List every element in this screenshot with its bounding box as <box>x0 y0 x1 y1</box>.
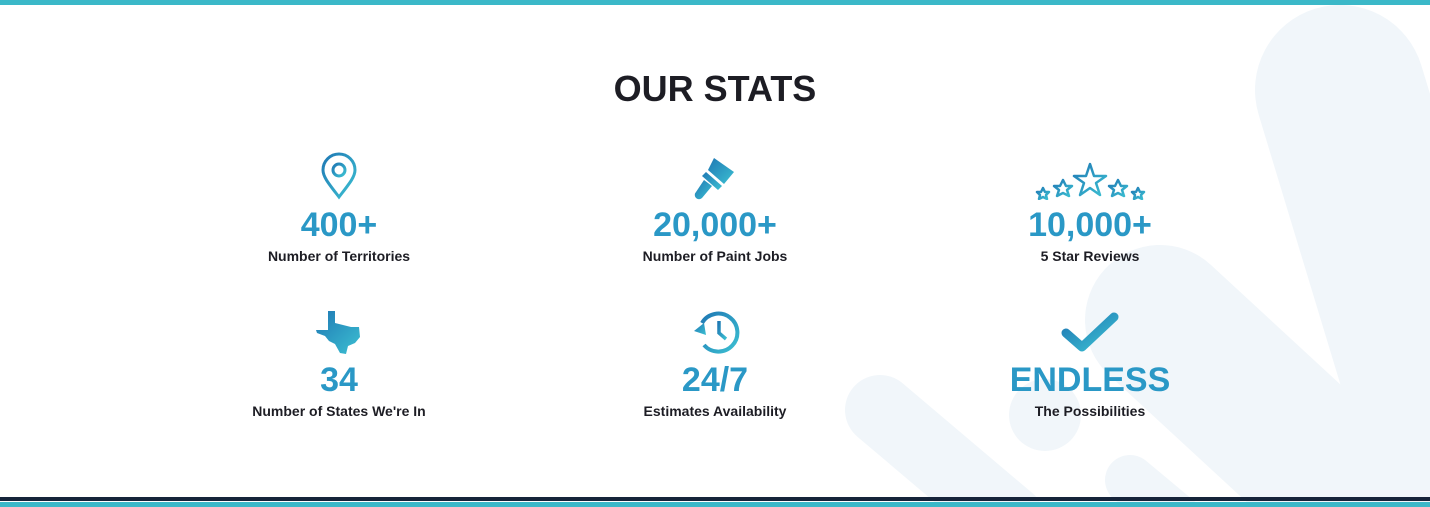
icon: texas <box>316 311 360 354</box>
icon: location pin <box>322 152 356 200</box>
stat: availability <box>644 312 786 419</box>
icon: clock history <box>694 312 740 354</box>
stat: endless: The Possibilities <box>1035 403 1145 419</box>
stat: states: Number of States We're In <box>252 403 426 419</box>
stat: paint jobs: Number of Paint Jobs <box>643 248 787 264</box>
stat: paint jobs: 20,000+ <box>653 206 777 244</box>
stat: territories <box>268 152 410 264</box>
title: OUR STATS <box>614 68 816 109</box>
stat: territories: Number of Territories <box>268 248 410 264</box>
stat: reviews: 5 Star Reviews <box>1041 248 1139 264</box>
stat: endless: ENDLESS <box>1010 361 1170 399</box>
stat: reviews: 10,000+ <box>1028 206 1152 244</box>
stat: availability: 24/7 <box>682 361 748 399</box>
icon: checkmark <box>1062 312 1118 352</box>
stat: territories: 400+ <box>301 206 377 244</box>
stat: states: 34 <box>320 361 358 399</box>
stat: reviews <box>1028 162 1152 264</box>
icon: stars <box>1036 162 1146 200</box>
icon: paintbrush <box>694 158 734 200</box>
stat: endless <box>1010 312 1170 419</box>
stat: paint jobs <box>643 158 787 264</box>
stat: availability: Estimates Availability <box>644 403 786 419</box>
stat: states <box>252 311 426 419</box>
